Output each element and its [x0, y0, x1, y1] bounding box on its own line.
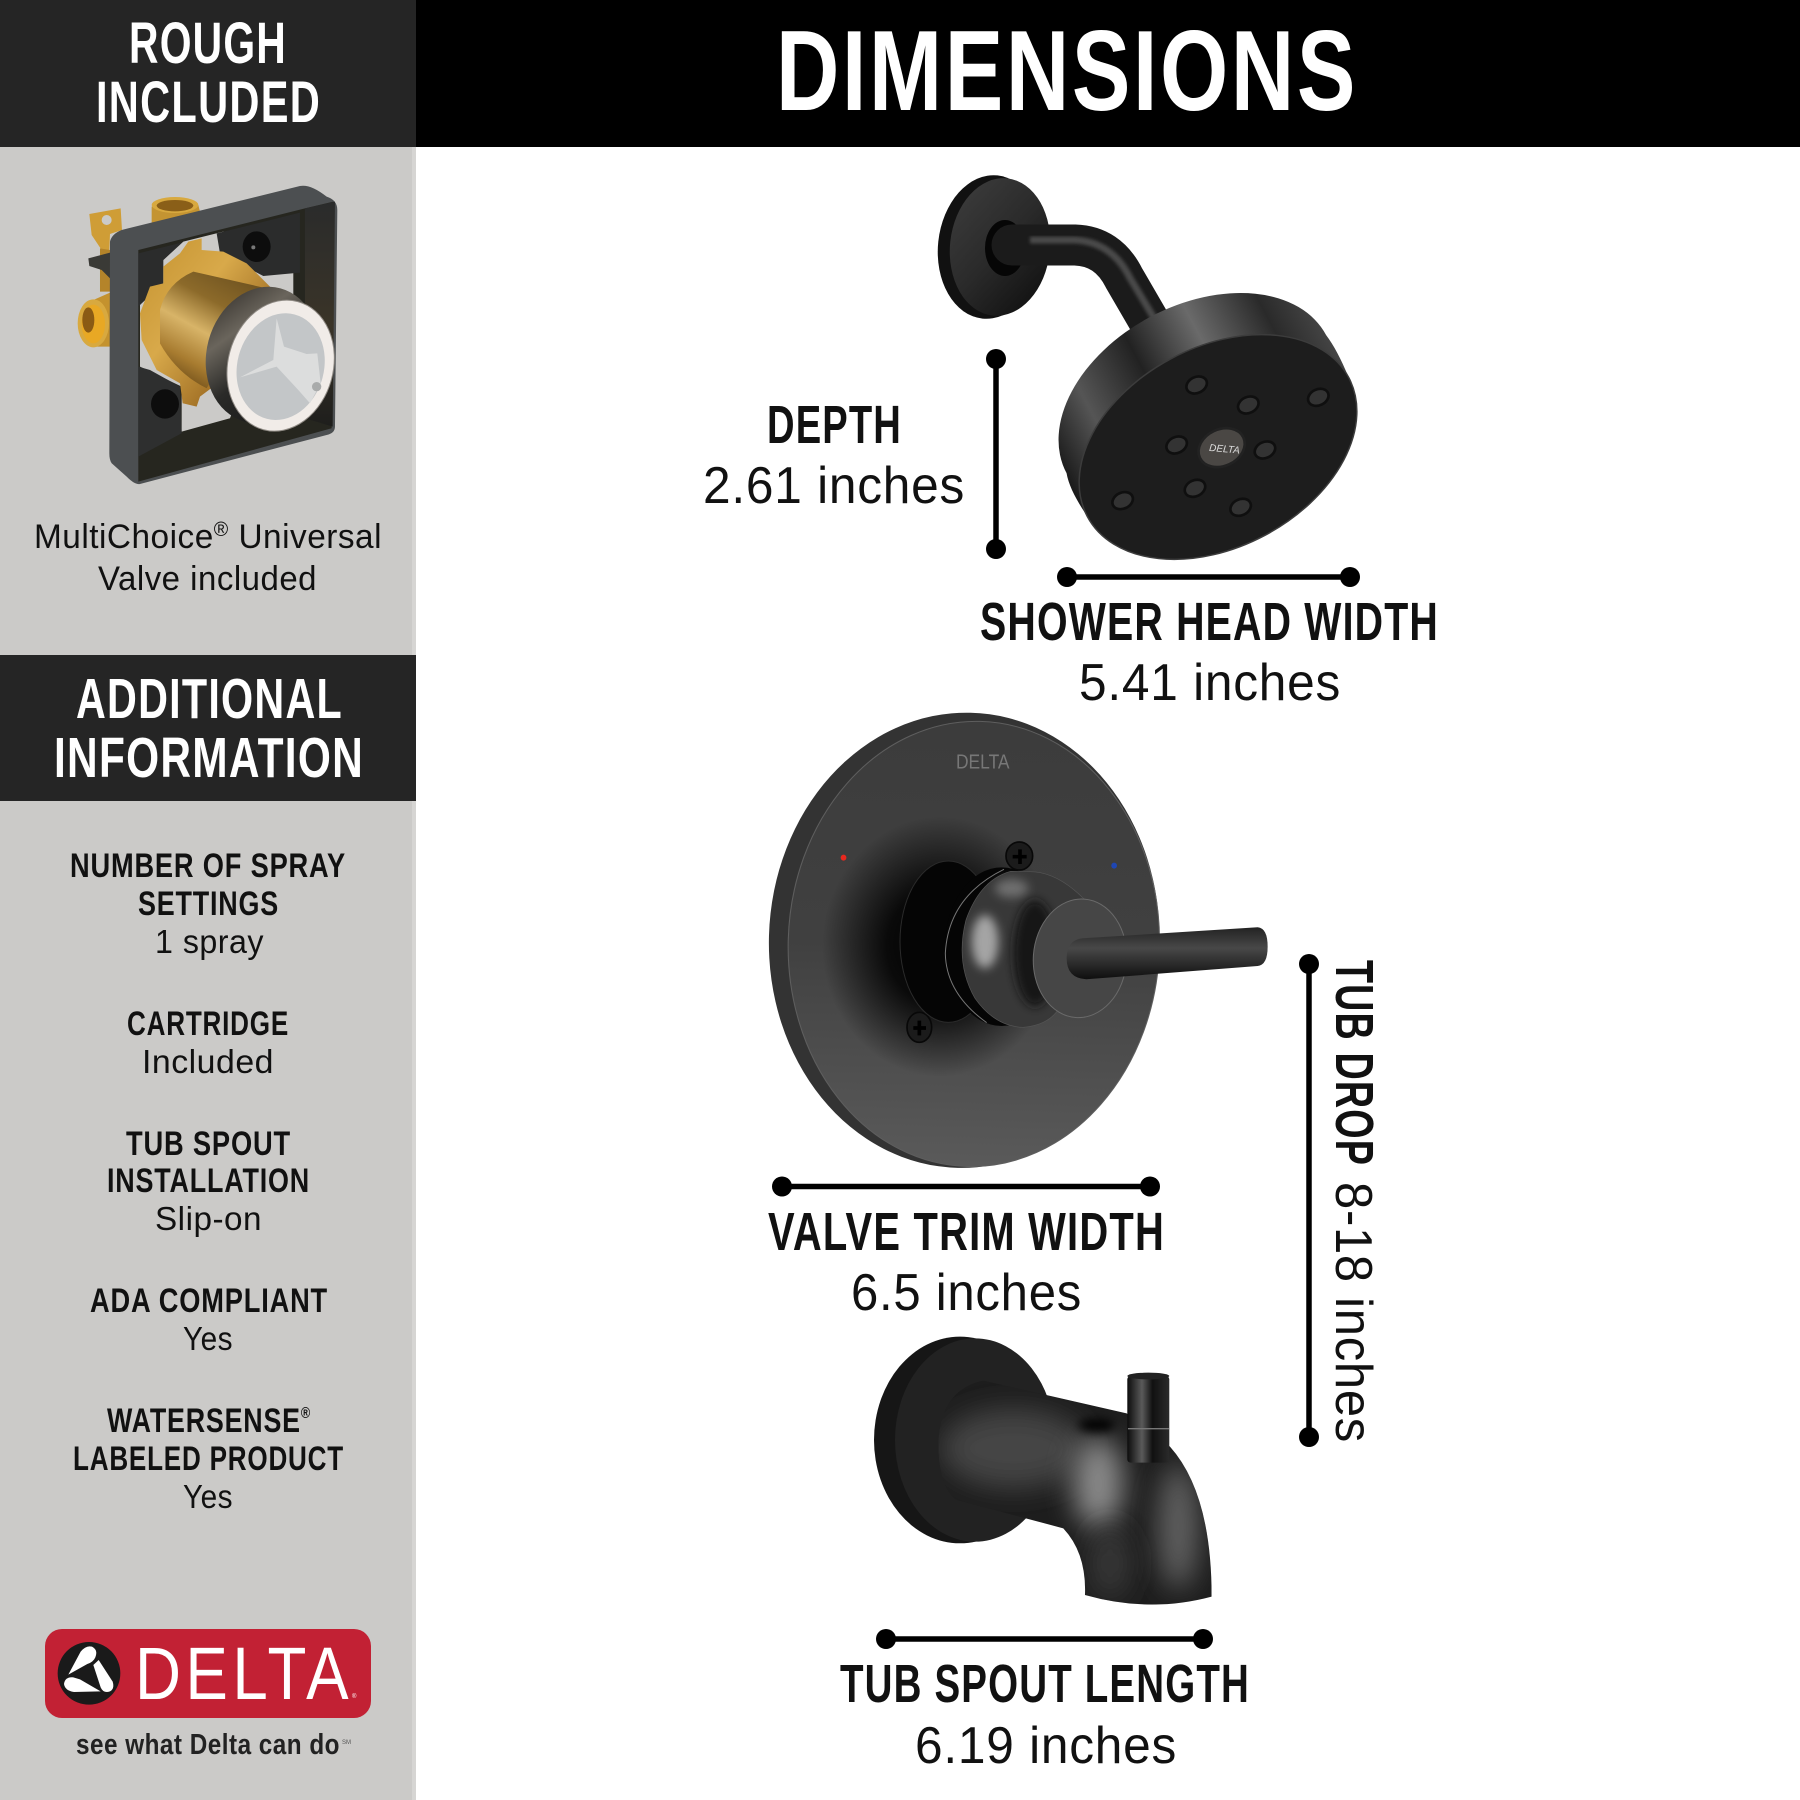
hub, bowl, cap [900, 842, 1131, 1042]
dimension: tub drop: 8-18 inches [1324, 1182, 1382, 1443]
spout body [939, 1395, 1212, 1605]
spec: watersense: WATERSENSE [107, 1402, 353, 1440]
spec: ada compliant: ADA COMPLIANT [90, 1282, 328, 1320]
text: valve caption [34, 518, 382, 598]
spec: ada compliant: Yes [183, 1320, 233, 1357]
brass left pipe [78, 293, 110, 347]
icon: rough-in valve photo [78, 186, 349, 484]
valve frame [109, 186, 337, 484]
spec: watersense: ® [301, 1405, 311, 1422]
spec: number of spray settings: NUMBER OF SPRAY [70, 847, 346, 885]
diverter knob [1127, 1373, 1169, 1463]
dimension: tub spout length: TUB SPOUT LENGTH [840, 1654, 1250, 1714]
logo: delta: DELTA [135, 1632, 353, 1715]
spec: number of spray settings: 1 spray [155, 923, 264, 960]
tagline: see what Delta can do [76, 1729, 340, 1761]
text: valve caption: ® [214, 519, 229, 541]
text: valve caption: MultiChoice [34, 518, 217, 556]
dimension: shower head width [980, 567, 1439, 712]
dimension: tub spout length: 6.19 inches [915, 1717, 1177, 1775]
text: valve caption: Valve included [98, 560, 317, 598]
cold indicator [1111, 863, 1117, 869]
logo symbol [58, 1642, 120, 1705]
spec: ada compliant [90, 1282, 328, 1357]
spec: watersense: Yes [183, 1478, 233, 1515]
heading: additional information [0, 655, 416, 801]
spec: watersense [73, 1402, 344, 1515]
dimension: valve trim width [768, 1176, 1165, 1322]
silver collar [191, 274, 335, 436]
spec: watersense: LABELED PRODUCT [73, 1440, 344, 1478]
text: valve caption: Universal [229, 518, 382, 556]
header bar: dimensions: DIMENSIONS [776, 8, 1358, 135]
dimension: valve trim width: 6.5 inches [851, 1264, 1082, 1322]
spec: number of spray settings [70, 847, 346, 960]
logo: delta: ® [352, 1693, 357, 1700]
photo: valve trim plate and handle [763, 708, 1268, 1173]
dimension: tub spout length [840, 1629, 1250, 1775]
dimension: valve trim width: VALVE TRIM WIDTH [768, 1202, 1165, 1262]
brass top pipe [152, 197, 200, 223]
frame interior [138, 202, 335, 482]
spec: tub spout installation: TUB SPOUT [126, 1125, 291, 1163]
shower arm [1012, 240, 1160, 340]
logo: delta: SM [342, 1740, 351, 1746]
photo: shower head and arm [931, 170, 1397, 605]
dimension: depth: 2.61 inches [703, 457, 965, 515]
heading: rough included [0, 0, 416, 147]
brand mark on plate: DELTA [956, 751, 1010, 773]
spec: tub spout installation: Slip-on [155, 1200, 262, 1237]
dimension: depth [703, 349, 1006, 559]
heading: rough included: ROUGH [129, 11, 287, 76]
spec: number of spray settings: SETTINGS [138, 885, 279, 923]
heading: additional information: ADDITIONAL [76, 667, 343, 731]
brass mounting tab [88, 208, 122, 292]
spec: cartridge: CARTRIDGE [127, 1005, 289, 1043]
dimension: shower head width: SHOWER HEAD WIDTH [980, 592, 1439, 652]
heading: rough included: INCLUDED [96, 70, 321, 135]
dimension: shower head width: 5.41 inches [1079, 654, 1341, 712]
spout flange [874, 1337, 1055, 1543]
shower nozzles [1110, 373, 1331, 519]
brass valve body [140, 238, 270, 407]
spec: tub spout installation [107, 1125, 310, 1237]
sidebar panel [0, 0, 416, 1800]
mounting screws [907, 842, 1033, 1042]
dimension: depth: DEPTH [767, 395, 902, 455]
shower head [1017, 247, 1397, 605]
header bar: dimensions [416, 0, 1800, 147]
lever handle [1067, 927, 1268, 979]
spec: cartridge: Included [142, 1043, 274, 1080]
shower flange [931, 170, 1057, 324]
chrome ring and plug [213, 288, 349, 443]
shower head brand mark: DELTA [1209, 443, 1241, 457]
spec: cartridge [127, 1005, 289, 1080]
dimension: tub drop [1299, 954, 1384, 1447]
hot indicator [841, 855, 846, 861]
trim plate [763, 708, 1166, 1173]
heading: additional information: INFORMATION [54, 726, 364, 790]
photo: tub spout [874, 1337, 1217, 1613]
spec: tub spout installation: INSTALLATION [107, 1162, 310, 1200]
logo: delta [45, 1629, 371, 1761]
dimension: tub drop: TUB DROP [1324, 960, 1384, 1166]
